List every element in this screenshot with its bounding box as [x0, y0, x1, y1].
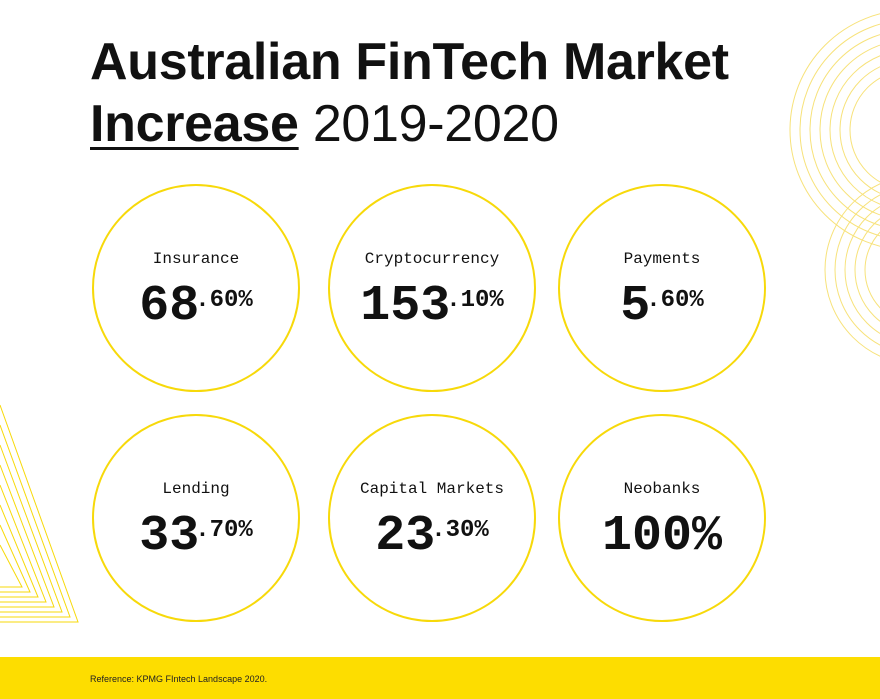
panel: neobanks: Neobanks: [624, 480, 700, 498]
footer: Reference: KPMG FIntech Landscape 2020.: [90, 674, 267, 684]
title: Australian FinTech Market: [90, 33, 729, 91]
decoration: right arcs: [790, 13, 880, 357]
panel: payments: 5.60%: [620, 278, 704, 335]
panel: insurance: 68.60%: [139, 278, 253, 335]
panel: payments: Payments: [624, 250, 700, 268]
panel: lending: Lending: [162, 480, 230, 498]
decoration: left triangles: [0, 404, 79, 622]
panel: capital markets: [328, 414, 536, 622]
panel: lending: 33.70%: [139, 508, 253, 565]
title: Increase 2019-2020: [90, 95, 559, 153]
panel: neobanks: 100%: [602, 508, 722, 565]
panel: capital markets: 23.30%: [375, 508, 489, 565]
panel: cryptocurrency: 153.10%: [360, 278, 504, 335]
panel: insurance: Insurance: [153, 250, 239, 268]
panel: neobanks: [558, 414, 766, 622]
panel: lending: [92, 414, 300, 622]
panel: capital markets: Capital Markets: [360, 480, 504, 498]
footer: [0, 657, 880, 699]
panel: insurance: [92, 184, 300, 392]
title: [90, 33, 729, 153]
panel: payments: [558, 184, 766, 392]
panel: cryptocurrency: Cryptocurrency: [365, 250, 499, 268]
panel: cryptocurrency: [328, 184, 536, 392]
